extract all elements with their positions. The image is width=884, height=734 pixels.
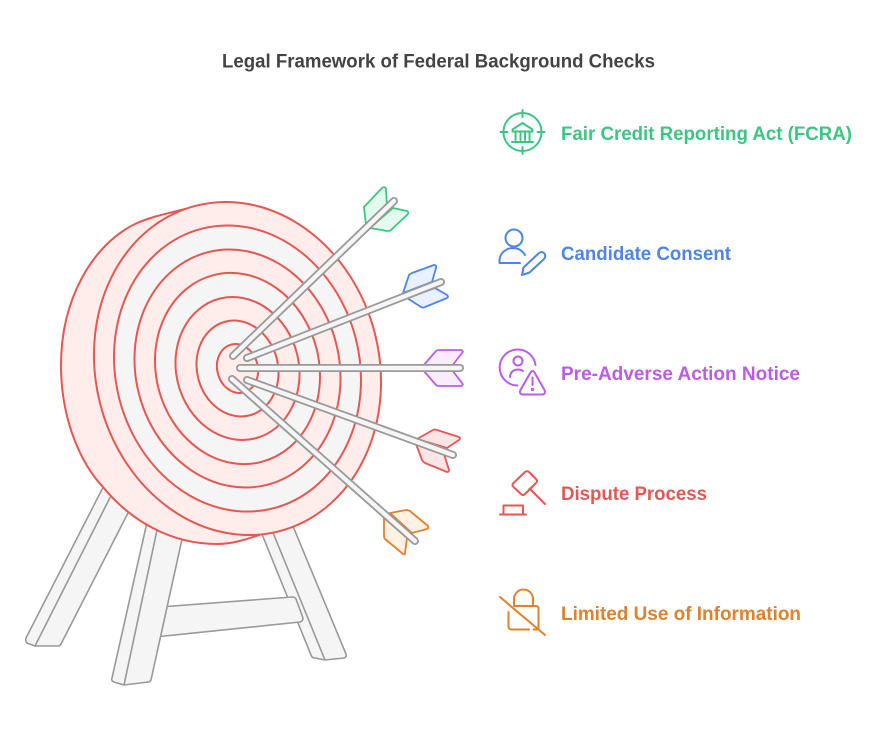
stand: middle leg [112,500,188,685]
label: Candidate Consent: Candidate Consent [561,244,732,265]
stand: left leg [26,458,150,646]
arrow: red [247,380,460,472]
arrow: purple [240,350,463,386]
arrow: blue [247,265,448,358]
label: Limited Use of Information: Limited Use of Information [561,604,801,625]
target on stand illustration [26,171,416,685]
stand: crossbar [155,597,303,637]
target rings [59,171,416,566]
arrow: green [233,187,408,356]
arrow: orange [232,379,428,554]
label: Pre-Adverse Action Notice: Pre-Adverse Action Notice [561,364,800,385]
icon: person with warning [500,350,545,394]
label: Dispute Process: Dispute Process [561,484,707,505]
label: FCRA: Fair Credit Reporting Act (FCRA) [561,124,852,145]
stand: right leg [255,507,346,660]
icon: crossed-out lock [500,590,545,635]
icon: gavel [500,471,545,514]
icon: bank in crosshair [500,110,544,154]
title: Legal Framework of Federal Background Checks [222,52,655,72]
icon: person with pen [500,230,545,275]
target back edge [61,209,300,544]
